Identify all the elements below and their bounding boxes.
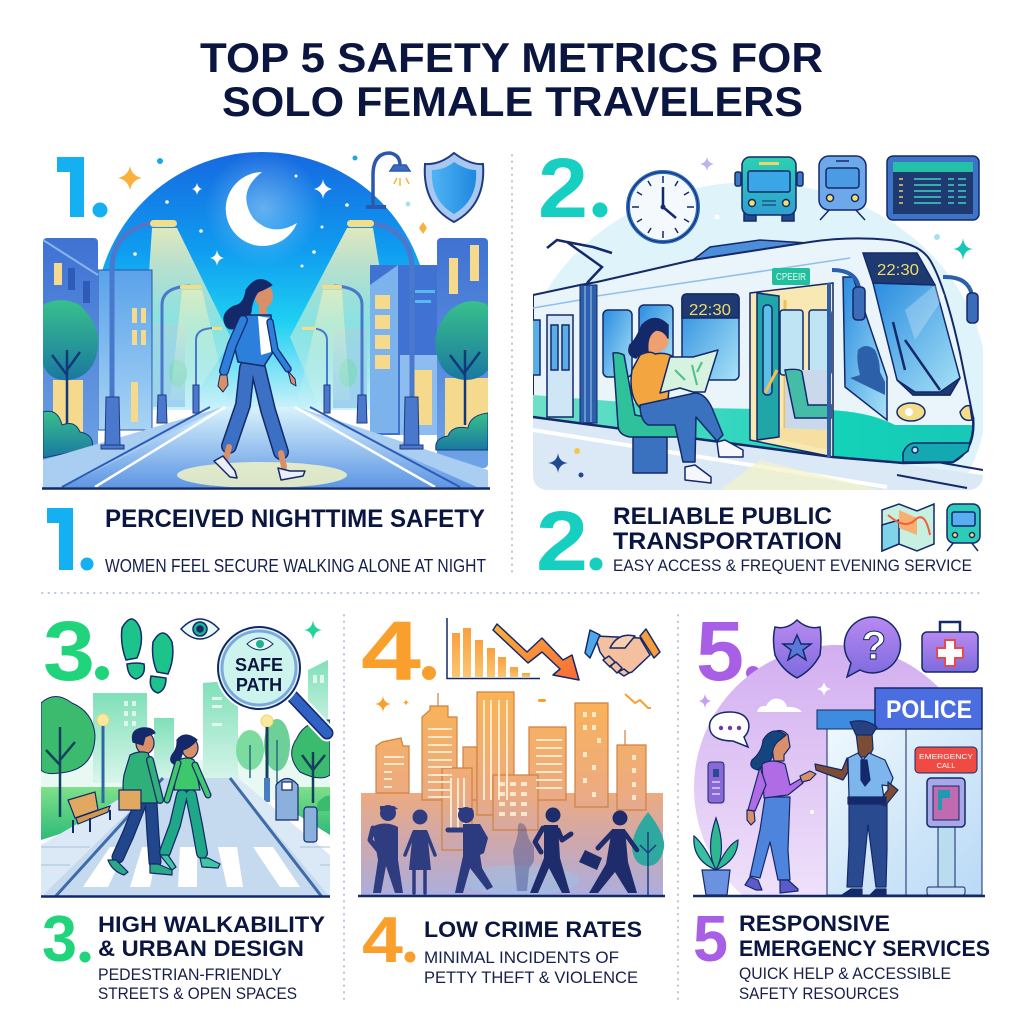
background circle — [694, 645, 980, 931]
emergency call box — [915, 747, 977, 895]
title — [200, 34, 823, 125]
moon and stars — [133, 150, 349, 268]
panel: metric 3 walkability — [41, 604, 330, 897]
speech bubble — [710, 712, 749, 747]
label: metric 5: 5 — [693, 902, 728, 975]
left tree — [41, 696, 95, 817]
panel: metric 5 emergency services — [693, 604, 985, 931]
police station — [817, 688, 982, 895]
pantograph — [547, 240, 612, 283]
number 4 — [361, 604, 436, 698]
label: metric 2: TRANSPORTATION — [613, 528, 842, 555]
potted plant — [694, 818, 738, 895]
open door and interior — [750, 283, 833, 457]
walking man — [108, 728, 172, 875]
night street scene — [43, 150, 488, 488]
icon: magnifier safe path: PATH — [236, 675, 282, 695]
woman talking — [745, 730, 816, 893]
walking woman — [160, 735, 220, 870]
cab windows — [843, 253, 960, 420]
path and sidewalk — [41, 778, 330, 897]
chart: falling bars — [447, 618, 540, 678]
tram body — [533, 238, 973, 463]
icon: first aid kit — [922, 622, 978, 672]
icon: shield — [425, 153, 483, 222]
icon: folded map — [882, 504, 934, 551]
label: metric 4: LOW CRIME RATES — [424, 917, 642, 942]
right tree — [292, 720, 330, 811]
label: metric 4: 4 — [362, 903, 403, 976]
platform sparkles — [548, 448, 584, 478]
destination sign — [772, 268, 810, 285]
person with cap — [370, 805, 403, 893]
number 2 — [538, 141, 608, 235]
background buildings — [93, 660, 328, 783]
icon: footprints — [122, 619, 173, 693]
icon: sparkle and dots — [118, 156, 427, 234]
mid trees — [236, 719, 290, 790]
roof unit — [693, 239, 804, 259]
sparkles and cloud — [699, 682, 831, 814]
icon: street lamp — [366, 153, 410, 207]
mirrors — [832, 270, 978, 323]
skyline windows — [384, 700, 562, 830]
label: metric 1: 1 — [45, 494, 75, 588]
panel: metric 4 crime rates — [358, 604, 665, 896]
base line — [42, 487, 490, 490]
person in dress — [405, 810, 435, 893]
street lamps — [101, 220, 423, 449]
icon: handshake — [585, 629, 660, 676]
faint person — [513, 823, 534, 891]
crosswalk — [83, 847, 300, 887]
walking woman — [214, 280, 305, 480]
tram: 22:30 — [689, 302, 731, 319]
trees — [43, 300, 488, 458]
distant buildings — [153, 323, 367, 408]
green park scene — [41, 660, 330, 897]
left buildings — [43, 238, 152, 468]
number 4: 4 — [361, 604, 421, 698]
icon: clock — [628, 172, 698, 242]
icon: question bubble — [844, 617, 901, 677]
icon: eye — [181, 619, 219, 639]
icon: timetable board — [887, 156, 979, 220]
people silhouettes — [370, 805, 637, 893]
destination sign: CPEEIR — [776, 272, 806, 283]
light cones — [140, 228, 385, 408]
label: metric 1 — [40, 494, 486, 588]
label: metric 5: QUICK HELP & ACCESSIBLE — [739, 964, 951, 983]
title: TOP 5 SAFETY METRICS FOR — [200, 34, 823, 81]
label: metric 3 — [42, 902, 325, 1003]
sky dome — [95, 152, 429, 410]
panel: metric 2 public transport — [533, 155, 983, 490]
right buildings — [370, 238, 488, 468]
number 3: 3 — [43, 604, 95, 698]
seated woman reading a map — [613, 318, 743, 483]
label: metric 3: HIGH WALKABILITY — [98, 912, 325, 937]
icon: question bubble: ? — [862, 624, 886, 668]
label: metric 4 — [362, 903, 642, 987]
icon: police badge — [774, 620, 821, 678]
label: metric 4: PETTY THEFT & VIOLENCE — [424, 968, 638, 987]
label: metric 2 — [536, 494, 972, 588]
icon: train — [819, 156, 866, 220]
man looking at phone — [448, 807, 493, 893]
articulation — [580, 285, 597, 423]
trash bin and bollard — [276, 778, 317, 842]
arrow: downward trend — [493, 624, 579, 680]
icon: sparkle — [304, 620, 322, 640]
icon: magnifier safe path: SAFE — [235, 655, 283, 675]
number 1: 1 — [54, 141, 86, 235]
label: metric 5: EMERGENCY SERVICES — [739, 936, 990, 961]
label: metric 2: EASY ACCESS & FREQUENT EVENING SERVICE — [613, 556, 972, 575]
label: metric 2: RELIABLE PUBLIC — [613, 503, 832, 530]
label: metric 5 — [693, 902, 990, 1003]
road — [43, 407, 488, 488]
tram — [531, 238, 978, 483]
icon: magnifier safe path — [215, 624, 327, 733]
decorative sparks — [375, 694, 651, 712]
police officer — [815, 721, 898, 895]
label: metric 4: MINIMAL INCIDENTS OF — [424, 948, 619, 967]
icon: bus — [735, 157, 803, 221]
street lamps — [97, 714, 273, 803]
tram: 22:30 — [877, 262, 919, 279]
skyline — [361, 692, 663, 895]
tram scene background — [533, 182, 983, 490]
label: metric 1: WOMEN FEEL SECURE WALKING ALONE AT NIGHT — [105, 556, 486, 576]
number 5: 5 — [696, 604, 744, 698]
tree — [632, 812, 664, 895]
label: metric 3: STREETS & OPEN SPACES — [98, 984, 297, 1003]
label: metric 2: 2 — [536, 494, 588, 588]
person walking — [530, 808, 571, 893]
wall panel device — [708, 762, 724, 803]
icon: small train — [947, 504, 980, 551]
label: metric 1: PERCEIVED NIGHTTIME SAFETY — [105, 505, 485, 533]
person with briefcase — [579, 810, 637, 893]
label: metric 3: 3 — [42, 902, 77, 975]
label: metric 5: SAFETY RESOURCES — [739, 984, 899, 1003]
emergency call box: EMERGENCY — [919, 752, 973, 761]
number 2: 2 — [538, 141, 588, 235]
side windows and door — [531, 294, 739, 417]
bench — [68, 792, 110, 833]
police station: POLICE — [886, 696, 972, 724]
grass — [41, 787, 330, 840]
title: SOLO FEMALE TRAVELERS — [222, 78, 803, 125]
label: metric 5: RESPONSIVE — [739, 911, 890, 936]
label: metric 3: PEDESTRIAN-FRIENDLY — [98, 965, 282, 984]
headlights and bumper — [897, 403, 972, 462]
label: metric 3: & URBAN DESIGN — [98, 936, 304, 961]
panel: metric 1 nighttime safety — [42, 141, 490, 488]
icon: sparkles — [700, 157, 973, 260]
emergency call box: CALL — [937, 761, 955, 770]
